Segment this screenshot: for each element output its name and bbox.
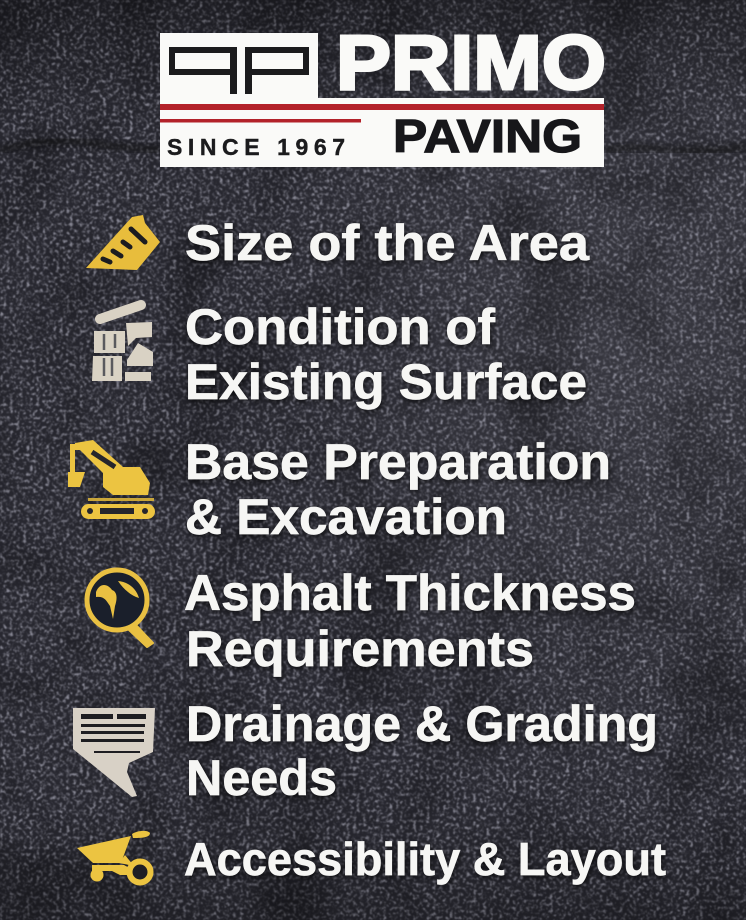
logo PP monogram [169,47,309,94]
heading: drainage and grading needs: Needs [186,750,337,806]
logo red stripes [160,104,604,122]
logo: Primo Paving since 1967 [160,20,606,167]
heading: accessibility and layout: Accessibility & Layout [184,833,666,885]
heading: asphalt thickness requirements [184,565,636,677]
heading: base preparation and excavation [185,434,611,545]
icon: drainage grate [73,708,155,797]
heading: base preparation and excavation: Base Preparation [185,434,611,490]
heading: base preparation and excavation: & Excavation [185,489,507,545]
logo wordmark PRIMO: PRIMO [336,20,606,106]
icon: broken pavement [92,305,153,381]
icon: magnifying glass with globe [87,570,153,647]
icon: wheelbarrow [77,831,150,882]
heading: asphalt thickness requirements: Asphalt Thickness [184,565,636,621]
logo since 1967: SINCE 1967 [167,134,345,160]
heading: drainage and grading needs [186,696,658,806]
logo wordmark PAVING: PAVING [393,110,582,162]
heading: condition of existing surface [185,299,587,410]
heading: size of the area: Size of the Area [185,215,590,271]
heading: condition of existing surface: Condition of [185,299,495,355]
heading: drainage and grading needs: Drainage & Grading [186,696,658,752]
heading: asphalt thickness requirements: Requirements [186,621,534,677]
icon: ruler [86,215,160,270]
icon: excavator [68,440,155,519]
heading: condition of existing surface: Existing Surface [185,354,587,410]
logo white plate [160,33,604,167]
